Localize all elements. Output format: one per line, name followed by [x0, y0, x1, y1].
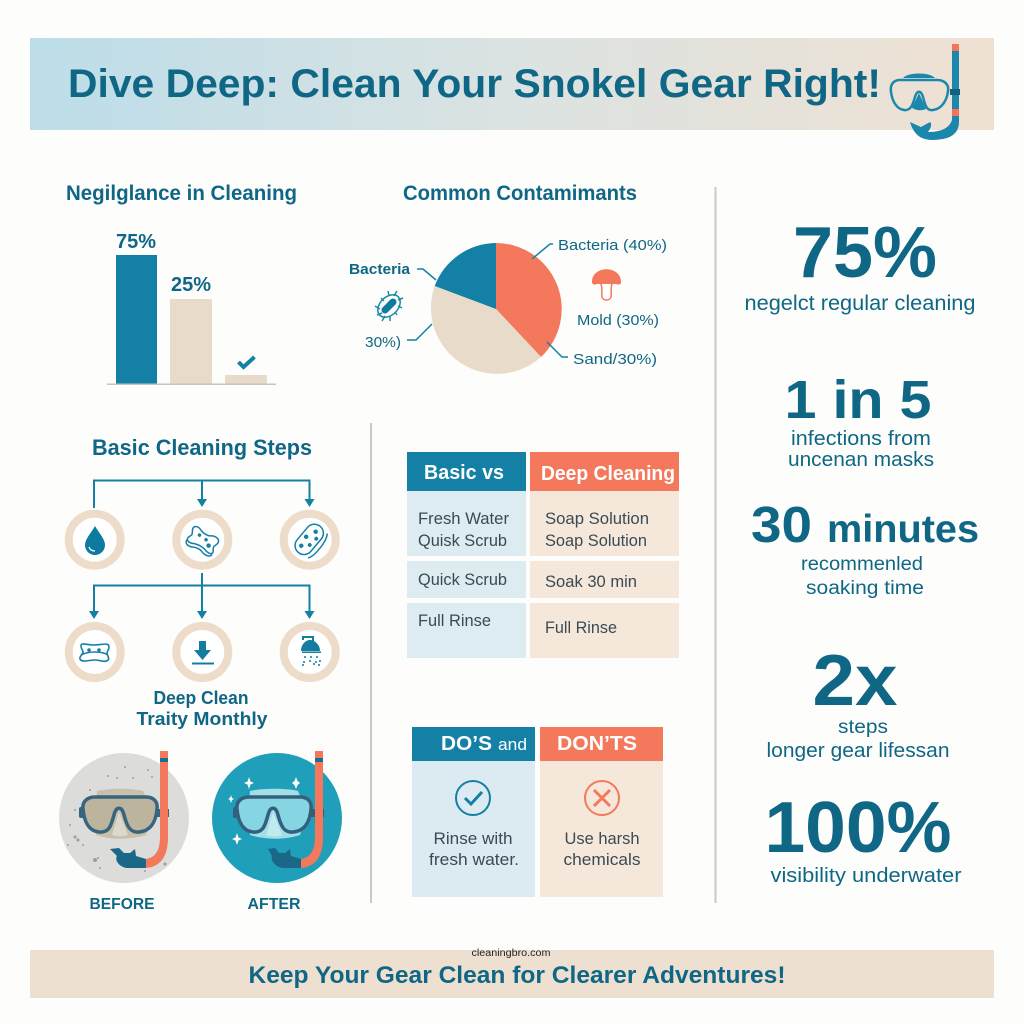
comparison table: Soap Solution: [545, 531, 647, 550]
icon: scrub sponge: [291, 521, 331, 561]
panel: don'ts: [540, 727, 663, 897]
icon: water drop: [85, 526, 105, 555]
panel: do's: DO’S: [441, 733, 492, 755]
heading: basic cleaning steps: Basic Cleaning Steps: [92, 435, 312, 460]
title banner: Dive Deep: Clean Your Snokel Gear Right!: [68, 62, 881, 106]
bar chart: [107, 231, 276, 385]
text: deep clean monthly: Traity Monthly: [136, 709, 268, 729]
text: deep clean monthly: [136, 688, 268, 729]
stat: 1 in 5: 1 in 5: [784, 370, 932, 430]
panel: don'ts: Use harsh: [564, 829, 640, 848]
watermark: cleaningbro.com: [472, 948, 550, 959]
stat: 75%: 75%: [793, 213, 937, 293]
panel: do's: Rinse with: [434, 829, 512, 848]
icon: snorkel and mask: [891, 44, 960, 140]
stat: 30 minutes: [751, 496, 979, 599]
comparison table: Soap Solution: [545, 509, 649, 528]
pie chart: [407, 243, 568, 374]
stat: 75%: [744, 213, 976, 315]
pie labels: Mold (30%): [577, 312, 659, 329]
label: after: AFTER: [248, 896, 301, 913]
pie labels: 30%): [365, 334, 401, 351]
stat: 2x: 2x: [812, 641, 898, 721]
footer banner: Keep Your Gear Clean for Clearer Adventures!: [248, 962, 786, 989]
comparison table: Soak 30 min: [545, 572, 637, 591]
stat: 30 minutes: 30: [751, 496, 812, 553]
stat: 1 in 5: [784, 370, 934, 471]
title banner: [30, 38, 994, 130]
icon: mushroom: [592, 269, 621, 300]
comparison table: Quick Scrub: [418, 570, 507, 589]
after illustration: [212, 751, 342, 883]
panel: do's: fresh water.: [429, 850, 519, 869]
icon: flat sponge: [80, 644, 109, 661]
footer banner: [30, 950, 994, 998]
pie labels: Bacteria (40%): [558, 237, 667, 254]
panel: do's: [412, 727, 535, 897]
comparison table: [407, 452, 679, 658]
pie labels: [349, 237, 667, 368]
vertical dividers: [370, 187, 716, 903]
bar chart: 25%: [171, 274, 211, 296]
stat: 100%: visibility underwater: [770, 865, 962, 887]
stat: 100%: 100%: [764, 788, 952, 868]
comparison table: Quisk Scrub: [418, 531, 507, 550]
stat: 30 minutes: recommenled: [801, 554, 923, 575]
panel: do's: and: [498, 735, 527, 754]
stat: 75%: negelct regular cleaning: [744, 292, 976, 315]
before illustration: [59, 751, 189, 883]
stat: 30 minutes: soaking time: [806, 578, 924, 599]
comparison table: Full Rinse: [418, 611, 491, 630]
panel: don'ts: DON’TS: [557, 733, 637, 755]
icon: bacteria: [373, 290, 405, 322]
pie labels: Sand/30%): [573, 351, 657, 368]
heading: common contaminants: Common Contamimants: [403, 182, 637, 205]
stat: 2x: longer gear lifessan: [766, 740, 950, 762]
step rings: [69, 514, 336, 678]
text: deep clean monthly: Deep Clean: [154, 688, 248, 708]
comparison table: Basic vs: [424, 462, 504, 484]
bar chart: 75%: [116, 231, 156, 253]
stat: 1 in 5: uncenan masks: [788, 449, 934, 471]
stat: 30 minutes: minutes: [827, 508, 979, 551]
icon: sponge: [185, 525, 220, 557]
icon: download arrow: [192, 641, 214, 664]
stat: 2x: [766, 641, 950, 762]
panel: don'ts: chemicals: [564, 850, 640, 869]
comparison table: Deep Cleaning: [541, 463, 675, 485]
pie labels: Bacteria: [349, 261, 411, 278]
stat: 1 in 5: infections from: [791, 428, 931, 450]
comparison table: Full Rinse: [545, 618, 617, 637]
flow arrows: [89, 480, 314, 619]
label: before: BEFORE: [90, 896, 155, 913]
heading: neglect bar chart: Negilglance in Cleaning: [66, 182, 297, 205]
stat: 2x: steps: [838, 717, 888, 738]
icon: shower: [301, 636, 321, 666]
comparison table: Fresh Water: [418, 509, 509, 528]
